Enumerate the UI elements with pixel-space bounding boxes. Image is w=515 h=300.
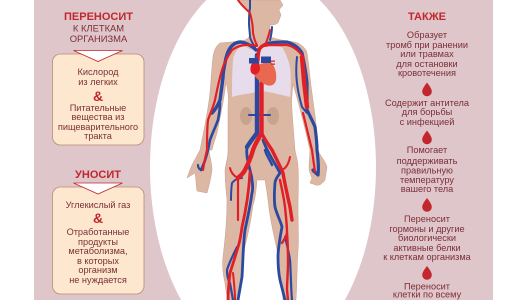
panel: also: для остановки [396,59,458,69]
panel: also: тромб при ранении [386,40,468,50]
panel: also: с инфекцией [400,117,454,127]
heading: also: ТАКЖЕ [408,11,446,23]
text: antibodies: Содержит антитела [385,98,470,108]
box: removes list [52,187,144,294]
body silhouette [187,0,327,300]
text: waste: Отработанные [67,227,129,237]
white oval behind body [150,0,376,300]
subheading: body: ОРГАНИЗМА [70,33,128,44]
heading: removes: УНОСИТ [75,169,121,181]
text: metabolism: метаболизма, [68,246,128,256]
panel: also: активные белки [393,243,461,253]
panel: also: температуру [400,175,454,185]
panel: also: для борьбы [402,107,452,117]
veins [198,0,318,300]
panel: also: правильную [401,166,453,176]
arteries [203,0,315,300]
text: from lungs: из легких [78,77,118,87]
panel: also: или травмах [400,49,454,59]
text: carbon dioxide: Углекислый газ [66,200,130,210]
arrow: removes [74,183,122,194]
ampersand: & [93,88,103,104]
subheading: to body cells: К КЛЕТКАМ [73,22,124,34]
icon: blood drop [422,82,432,96]
box: carries list [52,54,144,145]
text: clotting: Образует [407,30,448,40]
icon: blood drop [422,130,432,144]
text: organism: организм [78,265,118,275]
text: which: в которых [77,256,119,266]
icon: blood drop [422,266,432,280]
human body figure [187,0,327,300]
heart vessels [250,62,260,75]
lungs [232,44,291,97]
icon: blood drop [422,198,432,212]
text: nutrients: Питательные [70,103,126,113]
panel: carries away [52,169,144,294]
text: digestive: пищеварительного [58,122,138,132]
panel: also: биологически [398,233,456,243]
text: not needed: не нуждается [69,275,127,285]
text: oxygen: Кислород [77,67,119,77]
panel: carries to cells [52,11,144,145]
ampersand: & [93,210,103,226]
panel: also: вашего тела [401,184,454,194]
panel: also: к клеткам организма [383,252,472,262]
panel: also: гормоны и другие [389,224,465,234]
text: products: продукты [78,237,118,247]
text: tract: тракта [84,131,113,141]
panel: also [383,11,472,300]
kidneys [240,107,252,125]
panel: also: кровотечения [398,68,456,78]
panel: also: поддерживать [397,156,458,166]
text: hormones: Переносит [404,214,451,224]
panel: also: клетки по всему [393,290,462,300]
text: substances: вещества из [71,112,125,122]
heart [252,62,276,86]
text: cells: Переносит [404,282,451,292]
heading: carries: ПЕРЕНОСИТ [64,11,133,23]
text: temperature: Помогает [407,145,448,155]
arrow: carries [74,50,122,62]
